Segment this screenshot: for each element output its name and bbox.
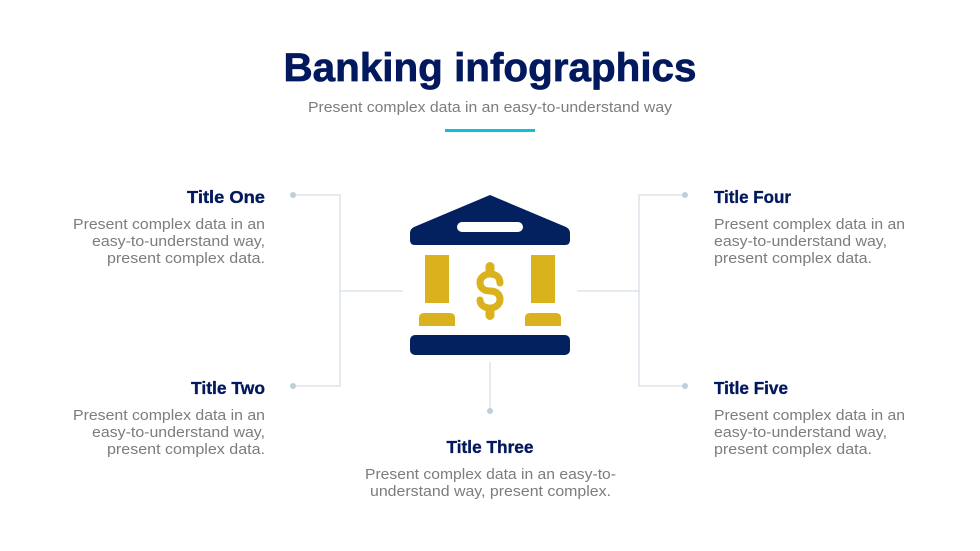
icon: dollar sign [480, 266, 500, 316]
icon: right column [531, 255, 555, 303]
block: Title Four: Present complex data in an [714, 217, 905, 233]
block: Title Two [73, 378, 265, 458]
block: Title Five [714, 378, 905, 458]
connector: bottom [487, 362, 493, 414]
block: Title Five: easy-to-understand way, [714, 425, 887, 441]
block: Title Three [365, 437, 616, 500]
block: Title Three: Present complex data in an easy-to- [365, 467, 616, 483]
block: Title Five: present complex data. [714, 442, 872, 458]
connector: right [577, 192, 688, 389]
block: Title Three: Title Three [446, 437, 534, 457]
block: Title One: easy-to-understand way, [92, 234, 265, 250]
block: Title One: Present complex data in an [73, 217, 265, 233]
block: Title Five: Title Five [714, 378, 788, 398]
block: Title One: Title One [187, 187, 265, 207]
block: Title Three: understand way, present complex. [370, 484, 611, 500]
block: Title Four: easy-to-understand way, [714, 234, 887, 250]
icon: floor [410, 335, 570, 355]
icon: left column base [419, 313, 455, 326]
block: Title Four: Title Four [714, 187, 791, 207]
accent underline [445, 129, 535, 132]
title: Banking infographics [284, 46, 696, 90]
block: Title Two: present complex data. [107, 442, 265, 458]
icon: roof [410, 195, 570, 245]
block: Title One: present complex data. [107, 251, 265, 267]
block: Title Two: Title Two [191, 378, 265, 398]
block: Title Four: present complex data. [714, 251, 872, 267]
block: Title Two: Present complex data in an [73, 408, 265, 424]
block: Title Two: easy-to-understand way, [92, 425, 265, 441]
block: Title Four [714, 187, 905, 267]
connector: left [290, 192, 403, 389]
icon: bank with dollar sign [410, 195, 570, 355]
subtitle: Present complex data in an easy-to-understand way [308, 99, 673, 116]
block: Title One [73, 187, 265, 267]
icon: left column [425, 255, 449, 303]
block: Title Five: Present complex data in an [714, 408, 905, 424]
icon: right column base [525, 313, 561, 326]
